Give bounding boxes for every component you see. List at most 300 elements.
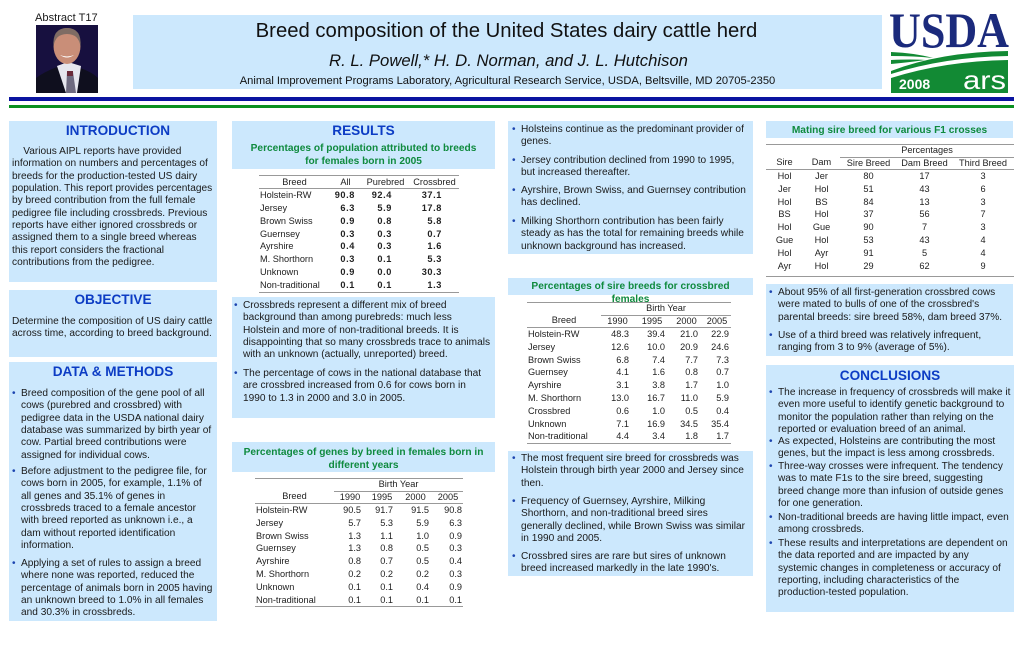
table title: Mating sire breed for various F1 crosses (792, 125, 987, 136)
table title: Percentages of population attributed to breeds (251, 142, 476, 154)
table: population by breed: All (340, 177, 351, 187)
bullet: before adjustment: cows born in 2005, for example, 1.1% of (21, 478, 202, 489)
table: mating sire breed: 91 (863, 248, 874, 258)
bullet: three-way crosses (778, 461, 1003, 510)
table: population by breed (259, 175, 459, 293)
table: population by breed: 6.3 (340, 203, 355, 213)
bullet: frequency: generally declined, while Brown Swiss was similar (521, 521, 745, 532)
bullet: before adjustment: all genes and 35.1% of genes in (21, 491, 165, 502)
table: mating sire breed: Dam Breed (901, 158, 948, 168)
panel: sire table title (508, 278, 753, 295)
table: mating sire breed: Jer (778, 184, 791, 194)
table: sire breeds: 1990 (607, 316, 628, 326)
bullet: increase in frequency: monitor the population rather than relying on the (778, 412, 994, 423)
table: mating sire breed: Hol (778, 248, 791, 258)
bullet: results dependent: systemic changes in completeness or accuracy of (778, 563, 1001, 574)
bullet: gene pool: cow. Partial breed contributions were (21, 437, 186, 448)
table: genes by breed: 0.8 (380, 543, 393, 553)
table: genes by breed: 0.4 (416, 582, 429, 592)
table: mating sire breed: Dam (812, 157, 831, 167)
panel: genes table title (232, 442, 495, 472)
panel: mating table title (766, 121, 1013, 138)
table: population by breed: 5.3 (427, 254, 442, 264)
table: mating sire breed: Hol (815, 261, 828, 271)
table: genes by breed: 1.1 (380, 531, 393, 541)
table: sire breeds: 3.8 (652, 380, 665, 390)
table: mating sire breed: Hol (778, 222, 791, 232)
table: population by breed: Guernsey (260, 229, 300, 239)
bullet: three-way crosses: for one generation. (778, 498, 863, 509)
table: sire breeds: Unknown (528, 419, 566, 429)
table: genes by breed: 0.9 (449, 531, 462, 541)
table: sire breeds: 2005 (707, 316, 727, 326)
table: genes by breed: Guernsey (256, 543, 296, 553)
heading: objective: OBJECTIVE (74, 292, 152, 307)
table: genes by breed: 0.2 (380, 569, 393, 579)
table: sire breeds: 24.6 (711, 342, 729, 352)
table: population by breed: 30.3 (422, 267, 442, 277)
bullet: before adjustment: Before adjustment to the pedigree file, for (21, 466, 207, 477)
table: population by breed: 0.8 (377, 216, 392, 226)
table: genes by breed: 91.5 (411, 505, 429, 515)
table: population by breed: 0.3 (340, 229, 355, 239)
table: mating sire breed: Gue (776, 235, 793, 245)
table: sire breeds: 7.3 (716, 355, 729, 365)
table title: Percentages of genes by breed in females born in (244, 446, 483, 458)
panel: first-generation text (766, 284, 1013, 356)
USDA logo: 2008 (899, 76, 930, 92)
table: population by breed: M. Shorthorn (260, 254, 313, 264)
bullet: gene pool: database was summarized by birth year of (21, 425, 211, 436)
bullet: before adjustment (21, 466, 207, 552)
affiliation: Animal Improvement Programs Laboratory, Agricultural Research Service, USDA, Beltsville, MD 20705-2350 (240, 75, 775, 87)
table: sire breeds: Ayrshire (528, 380, 562, 390)
bullet: results dependent: reporting, including characteristics of the (778, 575, 959, 586)
table: population by breed: Brown Swiss (260, 216, 313, 226)
bullet: rules: where none was reported, reduced the (21, 570, 194, 581)
introduction text: this report considers the fractional (12, 245, 164, 256)
table: mating sire breed: Gue (813, 222, 830, 232)
table: sire breeds: 0.4 (716, 406, 729, 416)
table: genes by breed: Ayrshire (256, 556, 290, 566)
bullet: first-generation cows: parental breeds: sire breed 58%, dam breed 37%. (778, 312, 1002, 323)
bullet: crossbreds mix: background than among purebreds: much less (243, 312, 452, 323)
table title: different years (328, 460, 398, 470)
table: sire breeds: 1995 (642, 316, 662, 326)
table: genes by breed: 1.3 (348, 543, 361, 553)
title banner (133, 15, 882, 89)
bullet: percentage of cows: The percentage of cows in the national database that (243, 368, 481, 379)
heading: introduction: INTRODUCTION (66, 123, 170, 138)
table: sire breeds: M. Shorthorn (528, 393, 581, 403)
table: genes by breed: 0.5 (416, 556, 429, 566)
table: mating sire breed: 29 (863, 261, 874, 271)
bullet: most frequent sire: then. (521, 478, 544, 489)
table: population by breed: 17.8 (422, 203, 442, 213)
table: genes by breed: 0.1 (380, 582, 393, 592)
table: mating sire breed: Ayr (815, 248, 828, 258)
table title (251, 142, 476, 166)
table: population by breed: 0.9 (340, 216, 355, 226)
table: population by breed: 0.1 (377, 254, 392, 264)
table: population by breed: 0.3 (340, 254, 355, 264)
bullet: ayrshire (521, 185, 746, 210)
table: sire breeds: 1.7 (716, 431, 729, 441)
bullet: percentage of cows: are crossbred increased from 0.6 for cows born in (243, 380, 466, 391)
table: population by breed: 1.3 (427, 280, 442, 290)
table: genes by breed: M. Shorthorn (256, 569, 309, 579)
table: genes by breed: 0.1 (348, 595, 361, 605)
USDA logo (889, 5, 1009, 95)
table: sire breeds: 21.0 (680, 329, 698, 339)
table: population by breed: 0.3 (377, 241, 392, 251)
table: genes by breed: 2005 (438, 492, 458, 502)
bullet: milking shorthorn: Milking Shorthorn contribution has been fairly (521, 216, 724, 227)
table: sire breeds: 0.8 (685, 367, 698, 377)
bullet: rules: percentage of animals born in 2005 having (21, 583, 212, 594)
table: population by breed: 0.0 (377, 267, 392, 277)
table: mating sire breed: 3 (980, 197, 986, 207)
table: genes by breed: 0.5 (416, 543, 429, 553)
table: sire breeds: 0.5 (685, 406, 698, 416)
bullet: before adjustment: crossbreds traced to a female ancestor (21, 503, 196, 514)
table title (244, 446, 483, 470)
bullet: before adjustment: information. (21, 540, 74, 551)
table: sire breeds: Holstein-RW (528, 329, 579, 339)
bullet: first-generation cows (778, 287, 1002, 324)
table: genes by breed: 90.8 (444, 505, 462, 515)
bullet: holsteins contributing: genes, but the impact is less among crossbreds. (778, 448, 995, 459)
bullet: milking shorthorn (521, 216, 744, 253)
table: mating sire breed: 3 (980, 171, 986, 181)
bullet: third breed: Use of a third breed was relatively infrequent, (778, 330, 981, 341)
table: population by breed: Holstein-RW (260, 190, 311, 200)
table: population by breed: 5.9 (377, 203, 392, 213)
bullet: holsteins contributing (778, 436, 995, 461)
table: sire breeds: 22.9 (711, 329, 729, 339)
introduction text: by breed contribution from the full female (12, 195, 195, 206)
table: genes by breed: 5.7 (348, 518, 361, 528)
table: mating sire breed: BS (815, 197, 828, 207)
bullet: rules: and 30.3% in crossbreds. (21, 607, 135, 618)
table: genes by breed: 0.3 (449, 569, 462, 579)
table: population by breed: Jersey (260, 203, 287, 213)
bullet: frequency (521, 496, 745, 545)
table: genes by breed: Jersey (256, 518, 283, 528)
table: mating sire breed: 7 (980, 209, 986, 219)
table: genes by breed: 6.3 (449, 518, 462, 528)
table: mating sire breed: 4 (980, 248, 986, 258)
bullet: holsteins: genes. (521, 136, 551, 147)
table: mating sire breed: Sire (776, 157, 793, 167)
bullet: milking shorthorn: steady as has the total for remaining breeds while (521, 228, 744, 239)
abstract label: Abstract T17 (35, 12, 98, 24)
table: genes by breed: 0.7 (380, 556, 393, 566)
bullet: results dependent: the data reported and are impacted by any (778, 550, 969, 561)
panel: introduction (9, 121, 217, 282)
title: Breed composition of the United States dairy cattle herd (256, 20, 757, 42)
introduction text: assigned them to a single breed whereas (12, 232, 197, 243)
bullet: most frequent sire: The most frequent sire breed for crossbreds was (521, 453, 739, 464)
table: mating sire breed: 17 (919, 171, 930, 181)
table title: Percentages of sire breeds for crossbred (531, 281, 730, 292)
bullet: gene pool: Breed composition of the gene pool of all (21, 388, 204, 399)
bullet: crossbreds mix: Crossbreds represent a different mix of breed (243, 300, 447, 311)
bullet: third breed: ranging from 3 to 9% (average of 5%). (778, 342, 950, 353)
table: sire breeds: 48.3 (611, 329, 629, 339)
table: mating sire breed: 7 (922, 222, 927, 232)
bullet: increase in frequency: reported or evaluation breed of an animal. (778, 424, 966, 435)
table: mating sire breed: 43 (919, 184, 930, 194)
table: genes by breed: 1.3 (348, 531, 361, 541)
bullet: crossbreds mix: Holstein and more of non-traditional breeds. It is (243, 325, 459, 336)
table: genes by breed: 1.0 (416, 531, 429, 541)
table: sire breeds: 16.7 (647, 393, 665, 403)
bullet: three-way crosses: breed change more than infusion of outside genes (778, 486, 1003, 497)
bullet: ayrshire: Ayrshire, Brown Swiss, and Guernsey contribution (521, 185, 746, 196)
table: population by breed: 0.1 (340, 280, 355, 290)
table: sire breeds: 7.1 (616, 419, 629, 429)
introduction text: contributions from the pedigree. (12, 257, 154, 268)
bullet: rules: Applying a set of rules to assign a breed (21, 558, 201, 569)
objective text: Determine the composition of US dairy cattle (12, 316, 212, 327)
table: sire breeds: 1.0 (716, 380, 729, 390)
table: sire breeds: Brown Swiss (528, 355, 581, 365)
table: sire breeds: 5.9 (716, 393, 729, 403)
table: sire breeds: 7.4 (652, 355, 665, 365)
bullet: non-traditional breeds: Non-traditional breeds are having little impact, even (778, 512, 1009, 523)
table: sire breeds: Non-traditional (528, 431, 588, 441)
heading: results: RESULTS (332, 123, 395, 138)
table: mating sire breed: Hol (778, 171, 791, 181)
table: genes by breed: 0.1 (449, 595, 462, 605)
table: genes by breed: 0.2 (348, 569, 361, 579)
table: sire breeds (527, 302, 731, 444)
table: mating sire breed: 80 (863, 171, 874, 181)
table: population by breed: 1.6 (427, 241, 442, 251)
table: genes by breed: 91.7 (375, 505, 393, 515)
table: genes by breed: 5.3 (380, 518, 393, 528)
table: genes by breed: 0.9 (449, 582, 462, 592)
table: sire breeds: Birth Year (646, 303, 686, 313)
table: population by breed: 92.4 (372, 190, 392, 200)
bullet: gene pool (21, 388, 211, 462)
table: sire breeds: 4.1 (616, 367, 629, 377)
table: sire breeds: 4.4 (616, 431, 629, 441)
table title: for females born in 2005 (305, 156, 422, 166)
table: mating sire breed: 4 (980, 235, 986, 245)
table: genes by breed: Breed (282, 491, 307, 501)
bullet: frequency: in 1990 and 2005. (521, 533, 602, 544)
table: mating sire breed: Ayr (778, 261, 791, 271)
bullet: increase in frequency: The increase in frequency of crossbreds will make it (778, 387, 1010, 398)
bullet: gene pool: assigned for individual cows. (21, 450, 150, 461)
introduction text: reports have either ignored crossbreds or (12, 220, 197, 231)
bullet: increase in frequency: even more useful to identify genetic background to (778, 399, 1004, 410)
bullet: first-generation cows: were mated to bulls of one of the crossbred's (778, 299, 979, 310)
USDA logo: ars (963, 65, 1006, 95)
bullet: frequency: Frequency of Guernsey, Ayrshire, Milking (521, 496, 705, 507)
table: mating sire breed: 6 (980, 184, 986, 194)
bullet: milking shorthorn: unknown background has increased. (521, 241, 686, 252)
bullet: crossbreds mix: disappointing that so many crossbreds trace to animals (243, 337, 490, 348)
table: sire breeds: 3.1 (616, 380, 629, 390)
table: mating sire breed: 37 (863, 209, 874, 219)
introduction text: pedigree file including crossbreds. Previous (12, 208, 207, 219)
bullet: ayrshire: has declined. (521, 197, 581, 208)
table: genes by breed: 1990 (340, 492, 360, 502)
bullet: holsteins: Holsteins continue as the predominant provider of (521, 124, 744, 135)
table: genes by breed: 0.1 (348, 582, 361, 592)
bullet: holsteins contributing: As expected, Holsteins are contributing the most (778, 436, 995, 447)
panel: results heading (232, 121, 495, 169)
table: population by breed: Breed (282, 177, 307, 187)
bullet: rules: an unknown breed to 1.0% in all females (21, 595, 203, 606)
table: mating sire breed: Percentages (901, 145, 953, 155)
bullet: non-traditional breeds (778, 512, 1009, 537)
bullet: third breed (778, 330, 981, 355)
table: genes by breed: Non-traditional (256, 595, 316, 605)
table: population by breed: 5.8 (427, 216, 442, 226)
table: sire breeds: 39.4 (647, 329, 665, 339)
bullet: crossbred sires: Crossbred sires are rare but sires of unknown (521, 551, 726, 562)
table: genes by breed: 0.4 (449, 556, 462, 566)
table: mating sire breed: 5 (922, 248, 927, 258)
table: mating sire breed: Hol (815, 235, 828, 245)
bullet: jersey: Jersey contribution declined from 1990 to 1995, (521, 155, 734, 166)
table: sire breeds: 2000 (676, 316, 697, 326)
table: sire breeds: 6.8 (616, 355, 629, 365)
table: population by breed: Ayrshire (260, 241, 294, 251)
table: sire breeds: Jersey (528, 342, 555, 352)
table: mating sire breed: Sire Breed (847, 158, 890, 168)
table: mating sire breed: 56 (919, 209, 930, 219)
table: genes by breed: 2000 (405, 492, 426, 502)
table: sire breeds: Crossbred (528, 406, 570, 416)
table: genes by breed: 0.3 (449, 543, 462, 553)
bullet: percentage of cows: 1990 to 1.3 in 2000 and 3.0 in 2005. (243, 393, 405, 404)
table: sire breeds: 7.7 (685, 355, 698, 365)
table: sire breeds: 16.9 (647, 419, 665, 429)
panel: objective (9, 290, 217, 357)
bullet: percentage of cows (243, 368, 481, 405)
table: sire breeds: Guernsey (528, 367, 568, 377)
bullet: first-generation cows: About 95% of all first-generation crossbred cows (778, 287, 995, 298)
bullet: three-way crosses: was to mate F1s to the sire breed, suggesting (778, 473, 983, 484)
introduction text: Various AIPL reports have provided (23, 146, 181, 157)
table: sire breeds: 12.6 (611, 342, 629, 352)
bullet: crossbred sires (521, 551, 726, 576)
table: genes by breed: 0.2 (416, 569, 429, 579)
bullet: gene pool: cows (purebred and crossbred) with (21, 400, 182, 411)
table: genes by breed: Unknown (256, 582, 294, 592)
table: sire breeds: 20.9 (680, 342, 698, 352)
table: genes by breed: 5.9 (416, 518, 429, 528)
table: mating sire breed (766, 144, 1014, 277)
panel: crossbreds text (232, 297, 495, 418)
table: sire breeds: 13.0 (611, 393, 629, 403)
introduction text: population. This report provides percentages (12, 183, 212, 194)
table: sire breeds: 0.6 (616, 406, 629, 416)
table: sire breeds: 1.8 (685, 431, 698, 441)
bullet: three-way crosses: Three-way crosses were infrequent. The tendency (778, 461, 1003, 472)
table: genes by breed (255, 478, 463, 607)
table: population by breed: 37.1 (422, 190, 442, 200)
table: mating sire breed: 62 (919, 261, 930, 271)
table: population by breed: Crossbred (413, 177, 456, 187)
table: genes by breed: 1995 (372, 492, 392, 502)
table: mating sire breed: Jer (815, 171, 828, 181)
bullet: non-traditional breeds: among crossbreds. (778, 524, 864, 535)
table: mating sire breed: BS (778, 209, 791, 219)
objective text (12, 316, 212, 339)
table title: females (612, 294, 649, 305)
table: sire breeds: 11.0 (681, 393, 698, 403)
bullet: before adjustment: with breed reported as unknown i.e., a (21, 515, 193, 526)
table: population by breed: 0.4 (340, 241, 355, 251)
bullet: most frequent sire: Holstein through birth year 2000 and Jersey since (521, 465, 744, 476)
table: mating sire breed: 43 (919, 235, 930, 245)
bullet: results dependent: production-tested population. (778, 587, 909, 598)
objective text: across time, according to breed background. (12, 328, 212, 339)
table: mating sire breed: Third Breed (959, 158, 1007, 168)
table: mating sire breed: 3 (980, 222, 986, 232)
table: population by breed: Non-traditional (260, 280, 320, 290)
table: mating sire breed: 84 (863, 197, 874, 207)
bullet: gene pool: pedigree data in the USDA national dairy (21, 413, 204, 424)
introduction text: information on numbers and percentages of (12, 158, 208, 169)
table: sire breeds: 0.7 (716, 367, 729, 377)
table: genes by breed: Brown Swiss (256, 531, 309, 541)
table: mating sire breed: 53 (863, 235, 874, 245)
bullet: crossbred sires: breed increased markedly in the late 1990's. (521, 563, 719, 574)
table: genes by breed: 0.1 (416, 595, 429, 605)
bullet: jersey (521, 155, 734, 180)
table: mating sire breed: 51 (863, 184, 874, 194)
panel: sire breeds text (508, 451, 753, 576)
table: sire breeds: Breed (552, 315, 576, 325)
introduction text (12, 146, 212, 268)
bullet: crossbreds mix (243, 300, 490, 362)
authors: R. L. Powell,* H. D. Norman, and J. L. Hutchison (329, 51, 688, 70)
table: sire breeds: 34.5 (680, 419, 698, 429)
introduction text: breeds for the production-tested US dairy (12, 171, 197, 182)
bullet: holsteins (521, 124, 744, 149)
bullet: results dependent: These results and interpretations are dependent on (778, 538, 1008, 549)
table: mating sire breed: Hol (815, 184, 828, 194)
table title (531, 281, 730, 305)
bullet: results dependent (778, 538, 1008, 600)
table: mating sire breed: Hol (815, 209, 828, 219)
table: sire breeds: 10.0 (647, 342, 665, 352)
bullet: most frequent sire (521, 453, 744, 490)
table: sire breeds: 3.4 (652, 431, 665, 441)
table: genes by breed: Holstein-RW (256, 505, 307, 515)
bullet: jersey: but increased thereafter. (521, 167, 630, 178)
heading: data and methods: DATA & METHODS (53, 364, 173, 379)
table: mating sire breed: 90 (863, 222, 874, 232)
bullet: crossbreds mix: with an unknown (actually, unreported) breed. (243, 349, 448, 360)
table: genes by breed: 0.1 (380, 595, 393, 605)
table: genes by breed: 0.8 (348, 556, 361, 566)
bullet: before adjustment: dam without reported identification (21, 528, 175, 539)
table: population by breed: 90.8 (335, 190, 355, 200)
table: sire breeds: 1.0 (652, 406, 665, 416)
bullet: increase in frequency (778, 387, 1010, 436)
bullet: rules (21, 558, 212, 620)
panel: data and methods (9, 362, 217, 621)
table: population by breed: 0.3 (377, 229, 392, 239)
